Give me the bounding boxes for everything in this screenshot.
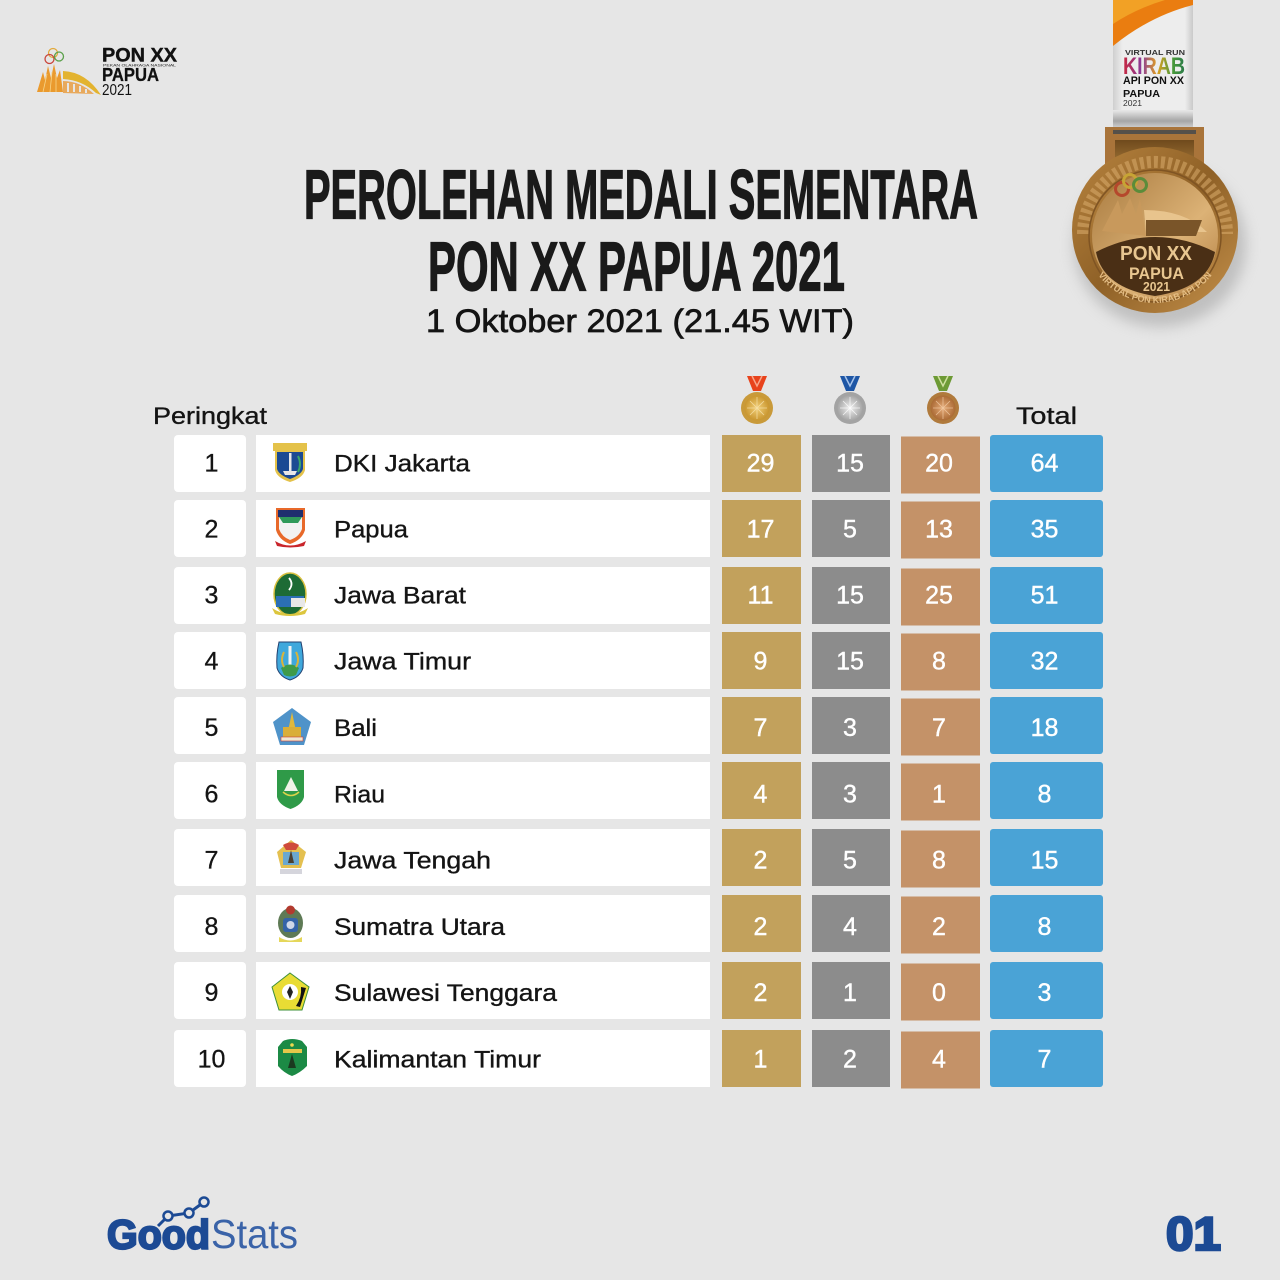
row 6: Riau: 8 [1038,780,1051,808]
icon: gold medal [741,376,773,424]
emblem: Sulawesi Tenggara [272,973,309,1010]
row 9: Sulawesi Tenggara: 2 [754,979,767,1007]
row 10: Kalimantan Timur: 7 [1038,1046,1051,1074]
row 7: Jawa Tengah [174,829,1103,888]
row 10: Kalimantan Timur: 2 [843,1046,857,1074]
row 9: Sulawesi Tenggara: 3 [1038,979,1051,1007]
medal disc: PAPUA [1129,264,1184,283]
table: medal standings [174,435,1103,1088]
medal disc: 2021 [1143,279,1170,294]
emblem: Sumatra Utara [278,906,303,942]
row 3: Jawa Barat [174,567,1103,626]
page number: 01 [1166,1207,1221,1260]
logo text: 2021 [102,82,132,99]
row 6: Riau: 4 [754,780,768,808]
row 6: Riau: 3 [843,780,857,808]
row 3: Jawa Barat: 3 [205,582,218,610]
icon: bronze medal [927,376,959,424]
logo: PON XX Papua 2021 [37,46,177,99]
row 3: Jawa Barat: 11 [748,582,773,610]
row 4: Jawa Timur: 32 [1031,648,1058,676]
row 5: Bali: 5 [205,714,218,742]
row 10: Kalimantan Timur: 10 [198,1046,225,1074]
row 5: Bali: 18 [1031,714,1058,742]
medal shadow [1074,163,1246,327]
ribbon: KIRAB [1123,53,1185,80]
medal illustration [1069,0,1251,332]
row 7: Jawa Tengah: Jawa Tengah [334,848,491,874]
logo text: PEKAN OLAHRAGA NASIONAL [103,62,177,68]
ribbon: PAPUA [1123,89,1160,100]
medal disc [1072,147,1238,313]
medal buckle [1105,127,1204,170]
row 4: Jawa Timur: 9 [754,648,767,676]
row 7: Jawa Tengah: 8 [932,846,946,874]
medal disc: PON XX [1120,243,1193,265]
ribbon: VIRTUAL RUN [1125,50,1185,57]
row 8: Sumatra Utara: 8 [205,913,218,941]
row 1: DKI Jakarta: 20 [925,450,953,478]
row 9: Sulawesi Tenggara: 1 [843,979,857,1007]
logo text [102,46,177,99]
row 1: DKI Jakarta: 64 [1031,450,1058,478]
row 2: Papua: 17 [747,516,774,544]
title: PON XX PAPUA 2021 [428,228,845,306]
logo: GoodStats: Stats [211,1211,298,1257]
row 7: Jawa Tengah: 2 [754,846,767,874]
row 1: DKI Jakarta: 15 [836,450,864,478]
logo text: PAPUA [102,65,159,85]
row 10: Kalimantan Timur: 1 [754,1046,767,1074]
row 4: Jawa Timur: 15 [836,648,864,676]
row 4: Jawa Timur: Jawa Timur [334,648,471,676]
row 5: Bali: 7 [932,714,946,742]
ribbon: API PON XX [1123,75,1185,87]
row 1: DKI Jakarta: 29 [747,450,774,478]
row 2: Papua [174,500,1103,558]
row 8: Sumatra Utara: 2 [932,913,946,941]
emblem: Kalimantan Timur [278,1039,307,1076]
row 2: Papua: 35 [1031,516,1058,544]
row 10: Kalimantan Timur [174,1030,1103,1088]
row 2: Papua: 2 [205,516,218,544]
row 5: Bali [174,697,1103,756]
ribbon [1113,0,1193,130]
emblem: Jawa Tengah [277,840,306,874]
row 3: Jawa Barat: 25 [925,582,953,610]
row 8: Sumatra Utara [174,895,1103,954]
row 4: Jawa Timur: 8 [932,648,946,676]
emblem: DKI Jakarta [273,443,307,482]
emblem: Bali [273,708,311,745]
row 6: Riau: 1 [932,780,946,808]
emblem: Jawa Barat [272,573,308,616]
header: Peringkat: Peringkat [153,403,267,430]
row 5: Bali: 3 [843,714,857,742]
row 9: Sulawesi Tenggara [174,962,1103,1020]
row 5: Bali: Bali [334,715,377,742]
logo stadium mark [37,48,101,95]
row 6: Riau: 6 [205,780,218,808]
row 9: Sulawesi Tenggara: Sulawesi Tenggara [334,980,558,1007]
row 6: Riau [174,762,1103,820]
row 6: Riau: Riau [334,782,385,808]
row 8: Sumatra Utara: 2 [754,913,767,941]
row 5: Bali: 7 [754,714,767,742]
row 7: Jawa Tengah: 15 [1031,846,1058,874]
row 2: Papua: 13 [925,516,953,544]
row 2: Papua: Papua [334,516,409,544]
row 1: DKI Jakarta: 1 [205,450,218,478]
row 3: Jawa Barat: 15 [836,582,864,610]
row 8: Sumatra Utara: Sumatra Utara [334,914,506,941]
row 9: Sulawesi Tenggara: 0 [932,979,946,1007]
row 4: Jawa Timur: 4 [205,648,219,676]
row 1: DKI Jakarta: DKI Jakarta [334,450,471,478]
row 2: Papua: 5 [843,516,857,544]
row 10: Kalimantan Timur: Kalimantan Timur [334,1046,541,1074]
row 3: Jawa Barat: Jawa Barat [334,582,466,610]
emblem: Papua [275,508,306,548]
header: Total: Total [1016,403,1077,430]
icon: silver medal [834,376,866,424]
row 7: Jawa Tengah: 5 [843,846,857,874]
emblem: Jawa Timur [277,642,303,680]
emblem: Riau [277,770,304,809]
row 1: DKI Jakarta [174,435,1103,494]
row 8: Sumatra Utara: 8 [1038,913,1051,941]
logo text: PON XX [102,46,177,66]
row 3: Jawa Barat: 51 [1031,582,1058,610]
logo: GoodStats [107,1198,298,1258]
row 4: Jawa Timur [174,632,1103,690]
logo: GoodStats: Good [107,1212,210,1258]
subtitle: date: 1 Oktober 2021 (21.45 WIT) [426,303,854,339]
row 8: Sumatra Utara: 4 [843,913,857,941]
row 9: Sulawesi Tenggara: 9 [205,979,218,1007]
ribbon: 2021 [1123,99,1143,108]
medal disc: VIRTUAL PON KIRAB API PON [1100,271,1212,304]
row 7: Jawa Tengah: 7 [205,846,218,874]
row 10: Kalimantan Timur: 4 [932,1046,946,1074]
title [304,156,978,306]
